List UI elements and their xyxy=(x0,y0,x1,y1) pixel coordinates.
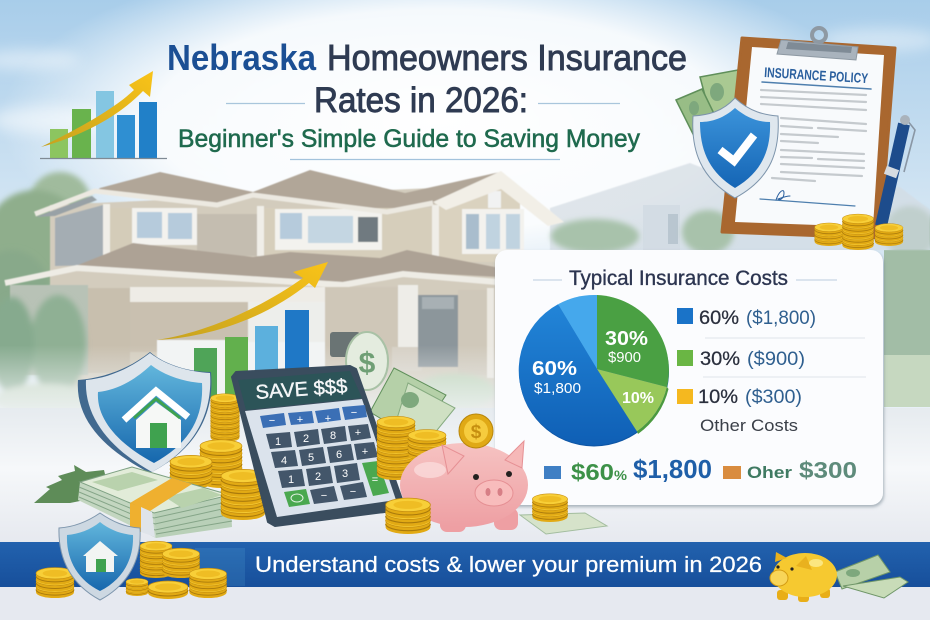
slice label 30% xyxy=(605,328,648,366)
icon: dollar medallion: $ xyxy=(359,347,376,380)
legend row 30% xyxy=(677,349,805,370)
eave lines xyxy=(35,191,433,214)
icon: bills behind clipboard xyxy=(676,70,742,138)
title block xyxy=(167,37,687,160)
slice label 60% xyxy=(532,358,581,397)
icon: bills behind calculator xyxy=(370,368,455,445)
title block: Homeowners Insurance xyxy=(327,37,687,78)
icon: piggy bank xyxy=(400,414,528,532)
summary row xyxy=(544,454,857,485)
haze over lawn xyxy=(0,345,500,413)
legend row 10%: 10% xyxy=(698,387,738,408)
icon: pen xyxy=(881,115,915,226)
legend row 60%: 60% xyxy=(699,308,739,329)
banner xyxy=(0,542,930,587)
summary row: $1,800 xyxy=(633,454,712,484)
calculator keys: 6 xyxy=(336,449,342,461)
subtitle: Beginner's Simple Guide to Saving Money xyxy=(178,125,640,153)
icon: gold piggy bank xyxy=(770,552,837,602)
background: main house xyxy=(5,170,564,410)
icon: rising chart behind calculator xyxy=(157,262,328,398)
window: upper right xyxy=(462,209,524,254)
calculator keys: − xyxy=(269,415,275,427)
icon: coin stack front xyxy=(221,469,265,520)
icon: small coin stacks on banner xyxy=(36,541,227,599)
icon: rising bar chart, top left xyxy=(40,71,167,158)
calculator keys: 5 xyxy=(308,452,314,464)
ground floor xyxy=(88,288,130,373)
window: upper left xyxy=(132,208,197,245)
calculator keys: + xyxy=(297,414,303,426)
icon: house shield xyxy=(78,352,211,473)
icon: calculator xyxy=(232,366,404,526)
calculator keys: 8 xyxy=(330,430,336,442)
calculator keys: 4 xyxy=(281,455,287,467)
calculator keys: 3 xyxy=(342,468,348,480)
legend row 30%: ($900) xyxy=(747,349,805,370)
icon: coin stacks left of calculator xyxy=(170,394,242,489)
icon: cash bundle xyxy=(78,467,232,538)
background: trees and lawn xyxy=(0,172,930,407)
calculator keys: 2 xyxy=(315,471,321,483)
calculator keys: + xyxy=(355,427,361,439)
calculator keys xyxy=(260,405,389,507)
heading: Typical Insurance Costs xyxy=(569,267,788,290)
slice label 30%: $900 xyxy=(608,350,641,366)
banner text: Understand costs & lower your premium in 2026 xyxy=(255,552,762,577)
slice label 60%: 60% xyxy=(532,358,577,380)
pie chart xyxy=(519,295,669,446)
icon: coin in slot: $ xyxy=(471,422,482,443)
legend row 10%: ($300) xyxy=(745,387,802,408)
background: shrubs xyxy=(0,295,495,416)
legend row 60%: ($1,800) xyxy=(746,308,816,329)
siding xyxy=(55,180,520,266)
calculator keys: 1 xyxy=(288,474,294,486)
slice label 30%: 30% xyxy=(605,328,648,350)
window: upper centre xyxy=(275,209,382,250)
icon: shield with check xyxy=(693,98,778,198)
calculator keys: = xyxy=(372,474,378,486)
calculator keys: − xyxy=(351,407,357,419)
calculator keys: 1 xyxy=(275,436,281,448)
icon: coin stack front of piggy xyxy=(386,498,430,534)
background: ground xyxy=(0,408,930,543)
title line 1: Nebraska xyxy=(167,37,317,78)
summary row: $60 xyxy=(571,459,614,485)
icon: dollar medallion xyxy=(330,332,388,390)
legend row 30%: 30% xyxy=(700,349,740,370)
calculator keys: + xyxy=(325,413,331,425)
slice label 10%: 10% xyxy=(622,390,654,407)
legend row 60% xyxy=(677,308,816,329)
calculator keys: 2 xyxy=(303,433,309,445)
title line 2: Rates in 2026: xyxy=(314,81,528,120)
icon: foliage xyxy=(34,465,110,503)
slice label 60%: $1,800 xyxy=(534,380,581,397)
icon: small house shield xyxy=(59,513,140,600)
policy heading: INSURANCE POLICY xyxy=(764,64,869,86)
icon: bills on banner xyxy=(835,555,908,598)
background: sky xyxy=(0,0,930,420)
calculator keys: − xyxy=(321,490,327,502)
other costs label: Other Costs xyxy=(700,416,798,435)
lower roof xyxy=(77,243,500,282)
calculator keys: − xyxy=(350,486,356,498)
icon: bill and coins right of piggy xyxy=(520,494,607,534)
footer strip xyxy=(0,587,930,620)
clip xyxy=(777,28,858,60)
calculator keys: + xyxy=(362,446,368,458)
icon: insurance clipboard xyxy=(676,28,915,250)
background: distant house xyxy=(550,163,930,254)
summary row: % xyxy=(614,467,628,483)
icon: coin stacks by clipboard xyxy=(815,214,903,250)
legend row 10% xyxy=(677,387,802,408)
summary row: $300 xyxy=(799,457,857,483)
panel: typical insurance costs xyxy=(495,250,883,505)
calculator display text: SAVE $$$ xyxy=(255,376,348,404)
summary row: Oher xyxy=(747,463,792,482)
legend xyxy=(677,308,866,435)
icon: coin stacks by piggy bank xyxy=(377,416,446,480)
